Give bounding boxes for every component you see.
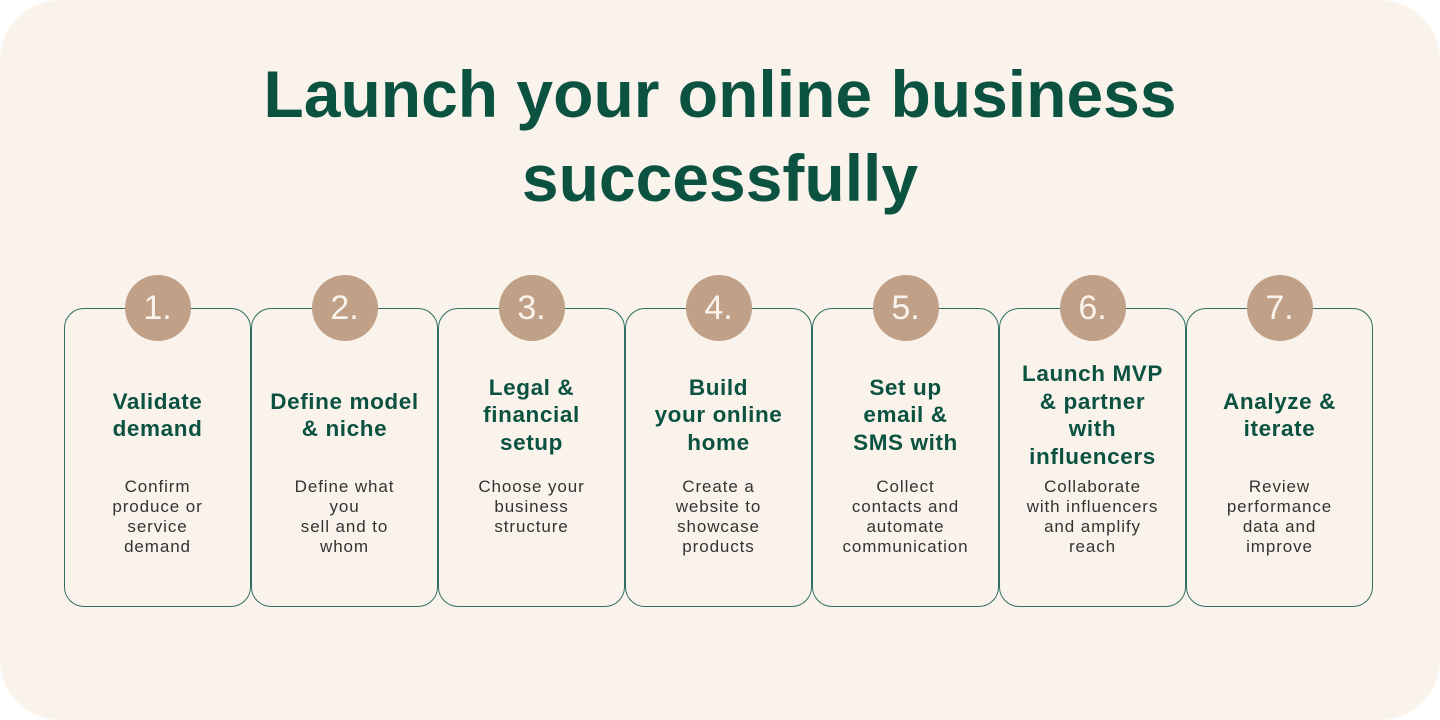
- body 7: performance: [1227, 497, 1332, 516]
- number 7: 7.: [1265, 289, 1294, 327]
- body 6: [1026, 477, 1158, 556]
- number 6: [1060, 275, 1126, 341]
- card 1: [64, 308, 251, 607]
- body 1: Confirm: [125, 477, 190, 496]
- body 4: products: [682, 537, 755, 556]
- body 7: data and: [1243, 517, 1316, 536]
- number 7: [1246, 275, 1312, 341]
- number 1: [124, 275, 190, 341]
- heading 6: & partner: [1040, 388, 1145, 414]
- body 2: you: [329, 497, 360, 516]
- heading 1: Validate: [113, 388, 202, 414]
- number 4: 4.: [704, 289, 733, 327]
- heading 3: setup: [500, 430, 563, 455]
- body 4: website to: [676, 497, 761, 516]
- body 1: [112, 477, 203, 556]
- body 5: communication: [842, 537, 969, 556]
- body 7: [1227, 477, 1332, 556]
- title: [263, 57, 1177, 215]
- number 6: 6.: [1078, 289, 1107, 327]
- heading 6: with: [1069, 416, 1116, 441]
- body 6: reach: [1069, 537, 1116, 556]
- heading 1: demand: [113, 416, 202, 441]
- body 4: Create a: [682, 477, 755, 496]
- heading 2: [270, 388, 419, 441]
- heading 4: your online: [655, 402, 782, 427]
- body 3: structure: [494, 517, 569, 536]
- number 1: 1.: [143, 289, 172, 327]
- heading 5: SMS with: [853, 430, 958, 455]
- body 3: [478, 477, 585, 536]
- body 5: automate: [866, 517, 945, 536]
- body 2: whom: [320, 537, 369, 556]
- heading 1: [112, 388, 202, 441]
- heading 5: [853, 375, 958, 455]
- body 3: Choose your: [478, 477, 585, 496]
- body 6: Collaborate: [1044, 477, 1141, 496]
- number 5: [872, 275, 938, 341]
- body 2: [295, 477, 394, 556]
- title: successfully: [522, 141, 918, 215]
- body 5: contacts and: [852, 497, 959, 516]
- body 3: business: [494, 497, 569, 516]
- heading 4: Build: [689, 375, 748, 400]
- heading 2: Define model: [270, 388, 419, 414]
- body 2: Define what: [295, 477, 394, 496]
- card 7: [1186, 308, 1373, 607]
- number 2: 2.: [330, 289, 359, 327]
- heading 3: Legal &: [489, 375, 574, 400]
- body 1: service: [127, 517, 188, 536]
- body 5: Collect: [876, 477, 935, 496]
- number 3: [498, 275, 564, 341]
- heading 5: email &: [863, 402, 948, 427]
- heading 6: [1022, 361, 1163, 468]
- body 6: with influencers: [1027, 497, 1158, 516]
- body 1: demand: [124, 537, 191, 556]
- number 5: 5.: [891, 289, 920, 327]
- body 5: [842, 477, 969, 556]
- heading 4: [654, 375, 782, 455]
- body 7: improve: [1246, 537, 1313, 556]
- body 6: and amplify: [1044, 517, 1141, 536]
- card 4: [625, 308, 812, 607]
- number 2: [312, 275, 378, 341]
- heading 7: Analyze &: [1223, 388, 1336, 414]
- body 4: [676, 477, 761, 556]
- number 3: 3.: [517, 289, 546, 327]
- heading 6: Launch MVP: [1022, 361, 1163, 386]
- card 2: [251, 308, 438, 607]
- heading 7: [1223, 388, 1336, 441]
- card 5: [812, 308, 999, 607]
- heading 3: [483, 375, 580, 455]
- card 6: [999, 308, 1186, 607]
- body 7: Review: [1249, 477, 1310, 496]
- title: Launch your online business: [263, 57, 1177, 131]
- heading 5: Set up: [869, 375, 942, 400]
- heading 3: financial: [483, 402, 580, 427]
- number 4: [686, 275, 752, 341]
- heading 4: home: [687, 430, 750, 455]
- heading 7: iterate: [1244, 416, 1315, 441]
- body 1: produce or: [112, 497, 203, 516]
- card 3: [438, 308, 625, 607]
- heading 6: influencers: [1029, 444, 1156, 468]
- heading 2: & niche: [302, 416, 387, 441]
- body 2: sell and to: [301, 517, 388, 536]
- body 4: showcase: [677, 517, 760, 536]
